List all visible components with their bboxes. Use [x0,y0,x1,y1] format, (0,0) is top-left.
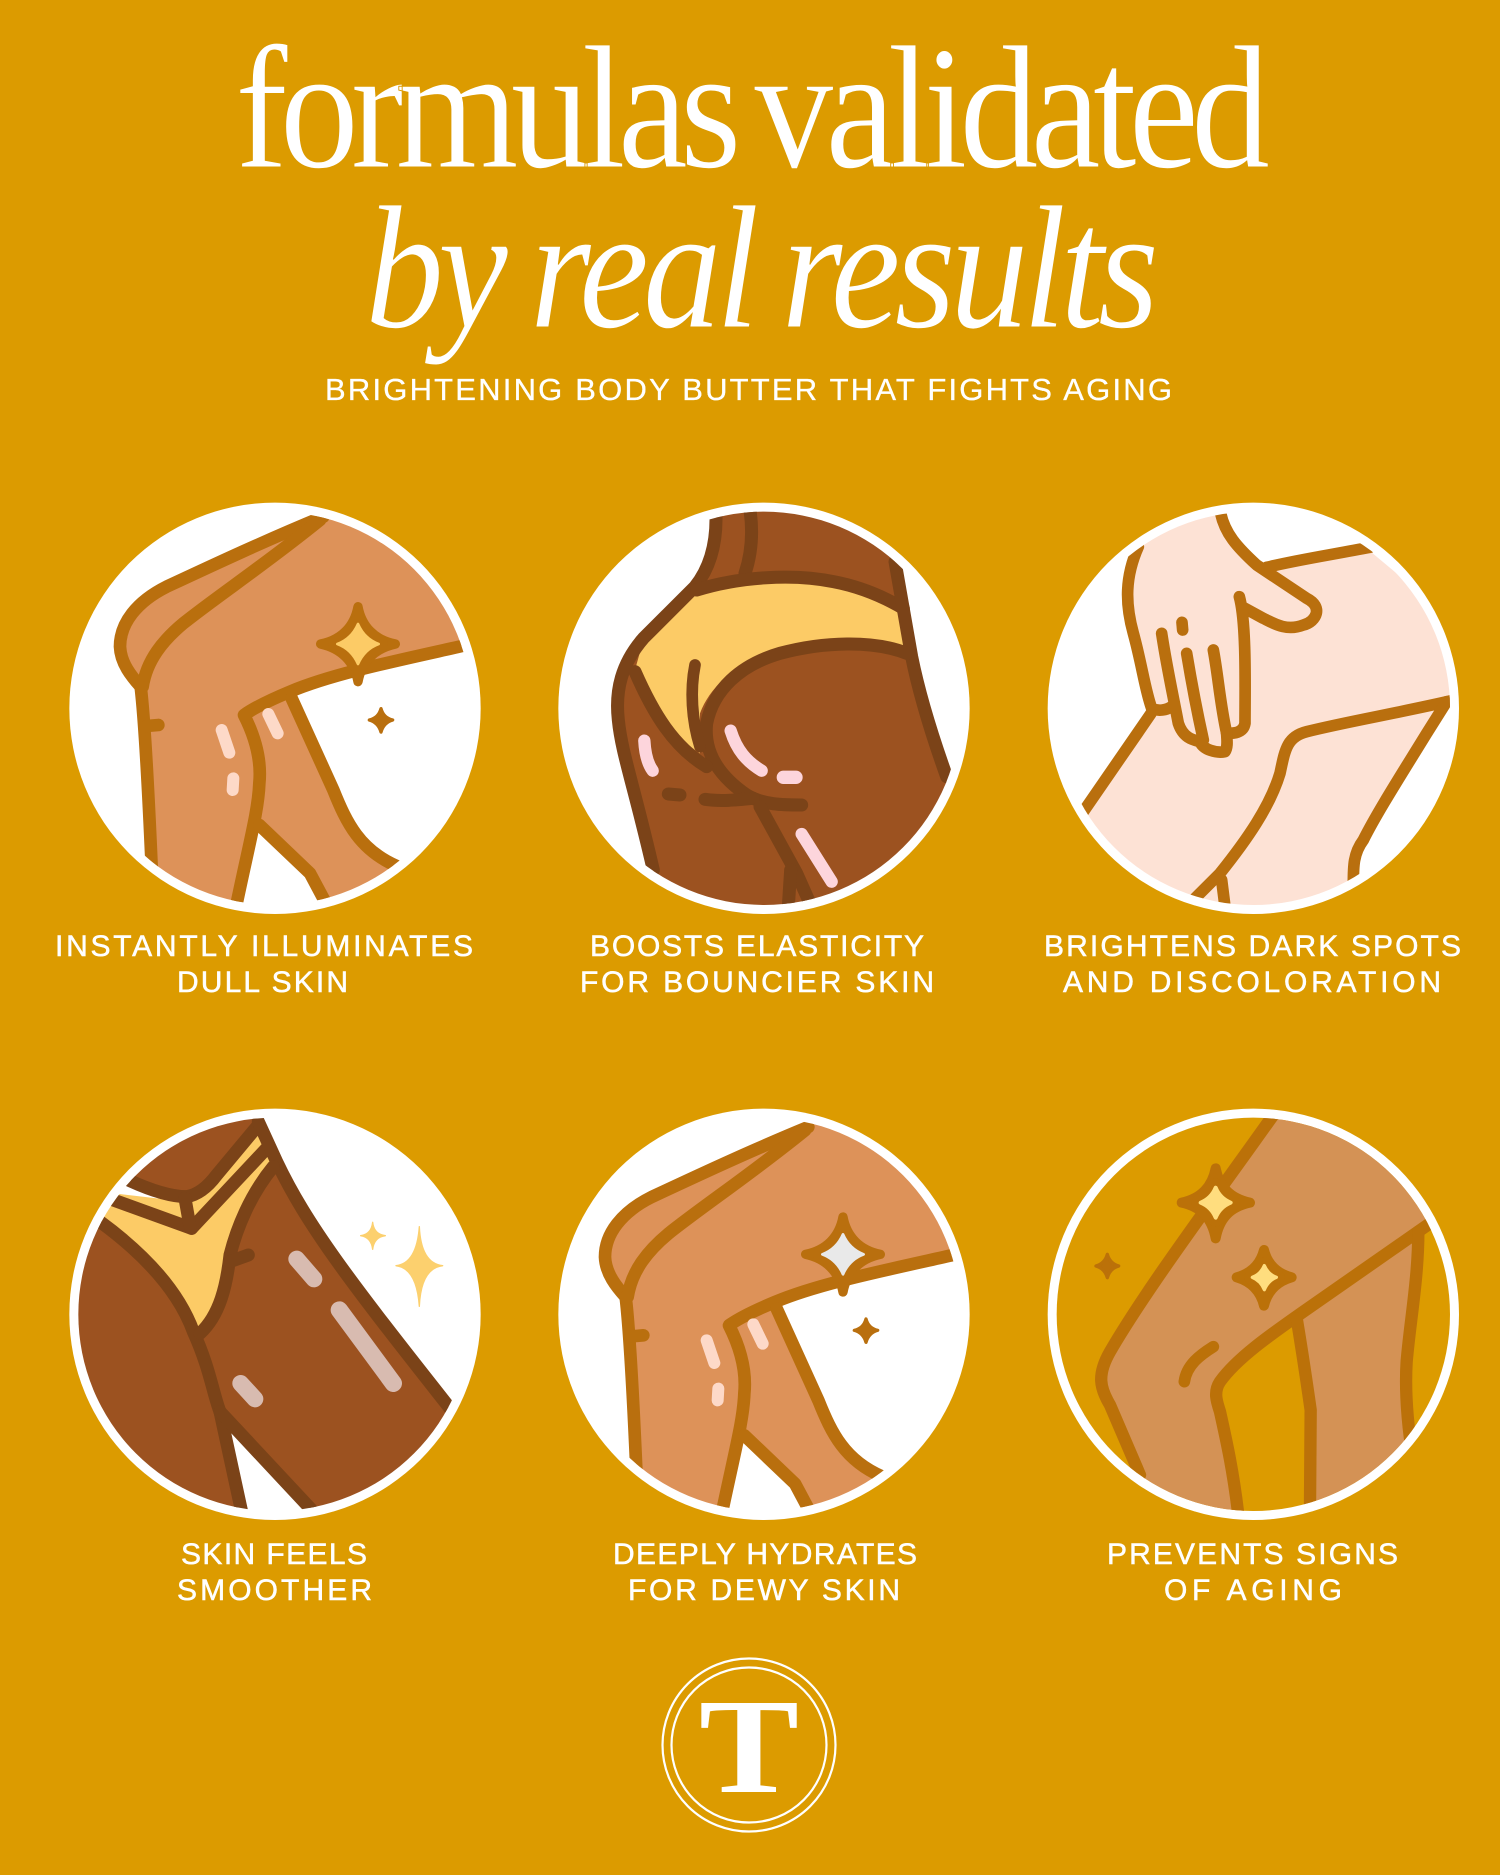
label: brightens dark spots: AND DISCOLORATION [1063,966,1441,999]
label: boosts elasticity: BOOSTS ELASTICITY [590,930,924,963]
label: deeply hydrates: FOR DEWY SKIN [628,1574,900,1607]
panel: instantly illuminates illustration [69,502,481,914]
sparkle large [806,1217,880,1292]
panel: prevents signs of aging illustration [1048,1108,1459,1520]
label: brightens dark spots [1044,930,1461,999]
sparkles [361,1222,443,1306]
label: skin feels smoother: SKIN FEELS [181,1538,367,1571]
label: prevents signs of aging [1107,1538,1398,1607]
label: prevents signs of aging: PREVENTS SIGNS [1107,1538,1398,1571]
label: deeply hydrates: DEEPLY HYDRATES [613,1538,917,1571]
label: prevents signs of aging: OF AGING [1164,1574,1342,1607]
label: boosts elasticity: FOR BOUNCIER SKIN [580,966,934,999]
logo: T [699,1672,799,1822]
sparkle two [1237,1250,1292,1306]
label: instantly illuminates: INSTANTLY ILLUMINATES [55,930,473,963]
logo [662,1658,836,1832]
highlights [222,714,278,790]
label: skin feels smoother: SMOOTHER [177,1574,372,1607]
panel: brightens dark spots illustration [1048,502,1459,914]
label: instantly illuminates [55,930,473,999]
label: deeply hydrates [613,1538,917,1607]
sparkle small [369,709,393,732]
sparkle large [321,607,395,682]
label: skin feels smoother [177,1538,372,1607]
sparkle small [854,1319,878,1342]
sparkle one [1182,1168,1250,1238]
highlights [241,1259,393,1399]
sparkle small [1096,1254,1119,1278]
highlights [707,1324,763,1400]
panel: skin feels smoother illustration [50,1095,481,1528]
panel: deeply hydrates illustration [558,1108,970,1520]
title [235,11,1268,366]
title: formulas validated [235,11,1268,206]
panel: boosts elasticity illustration [558,490,970,923]
underwear [635,582,907,753]
label: instantly illuminates: DULL SKIN [177,966,348,999]
label: brightens dark spots: BRIGHTENS DARK SPOTS [1044,930,1461,963]
title: by real results [365,171,1155,366]
subtitle: BRIGHTENING BODY BUTTER THAT FIGHTS AGING [325,372,1172,407]
highlights [644,731,832,882]
label: boosts elasticity [580,930,934,999]
